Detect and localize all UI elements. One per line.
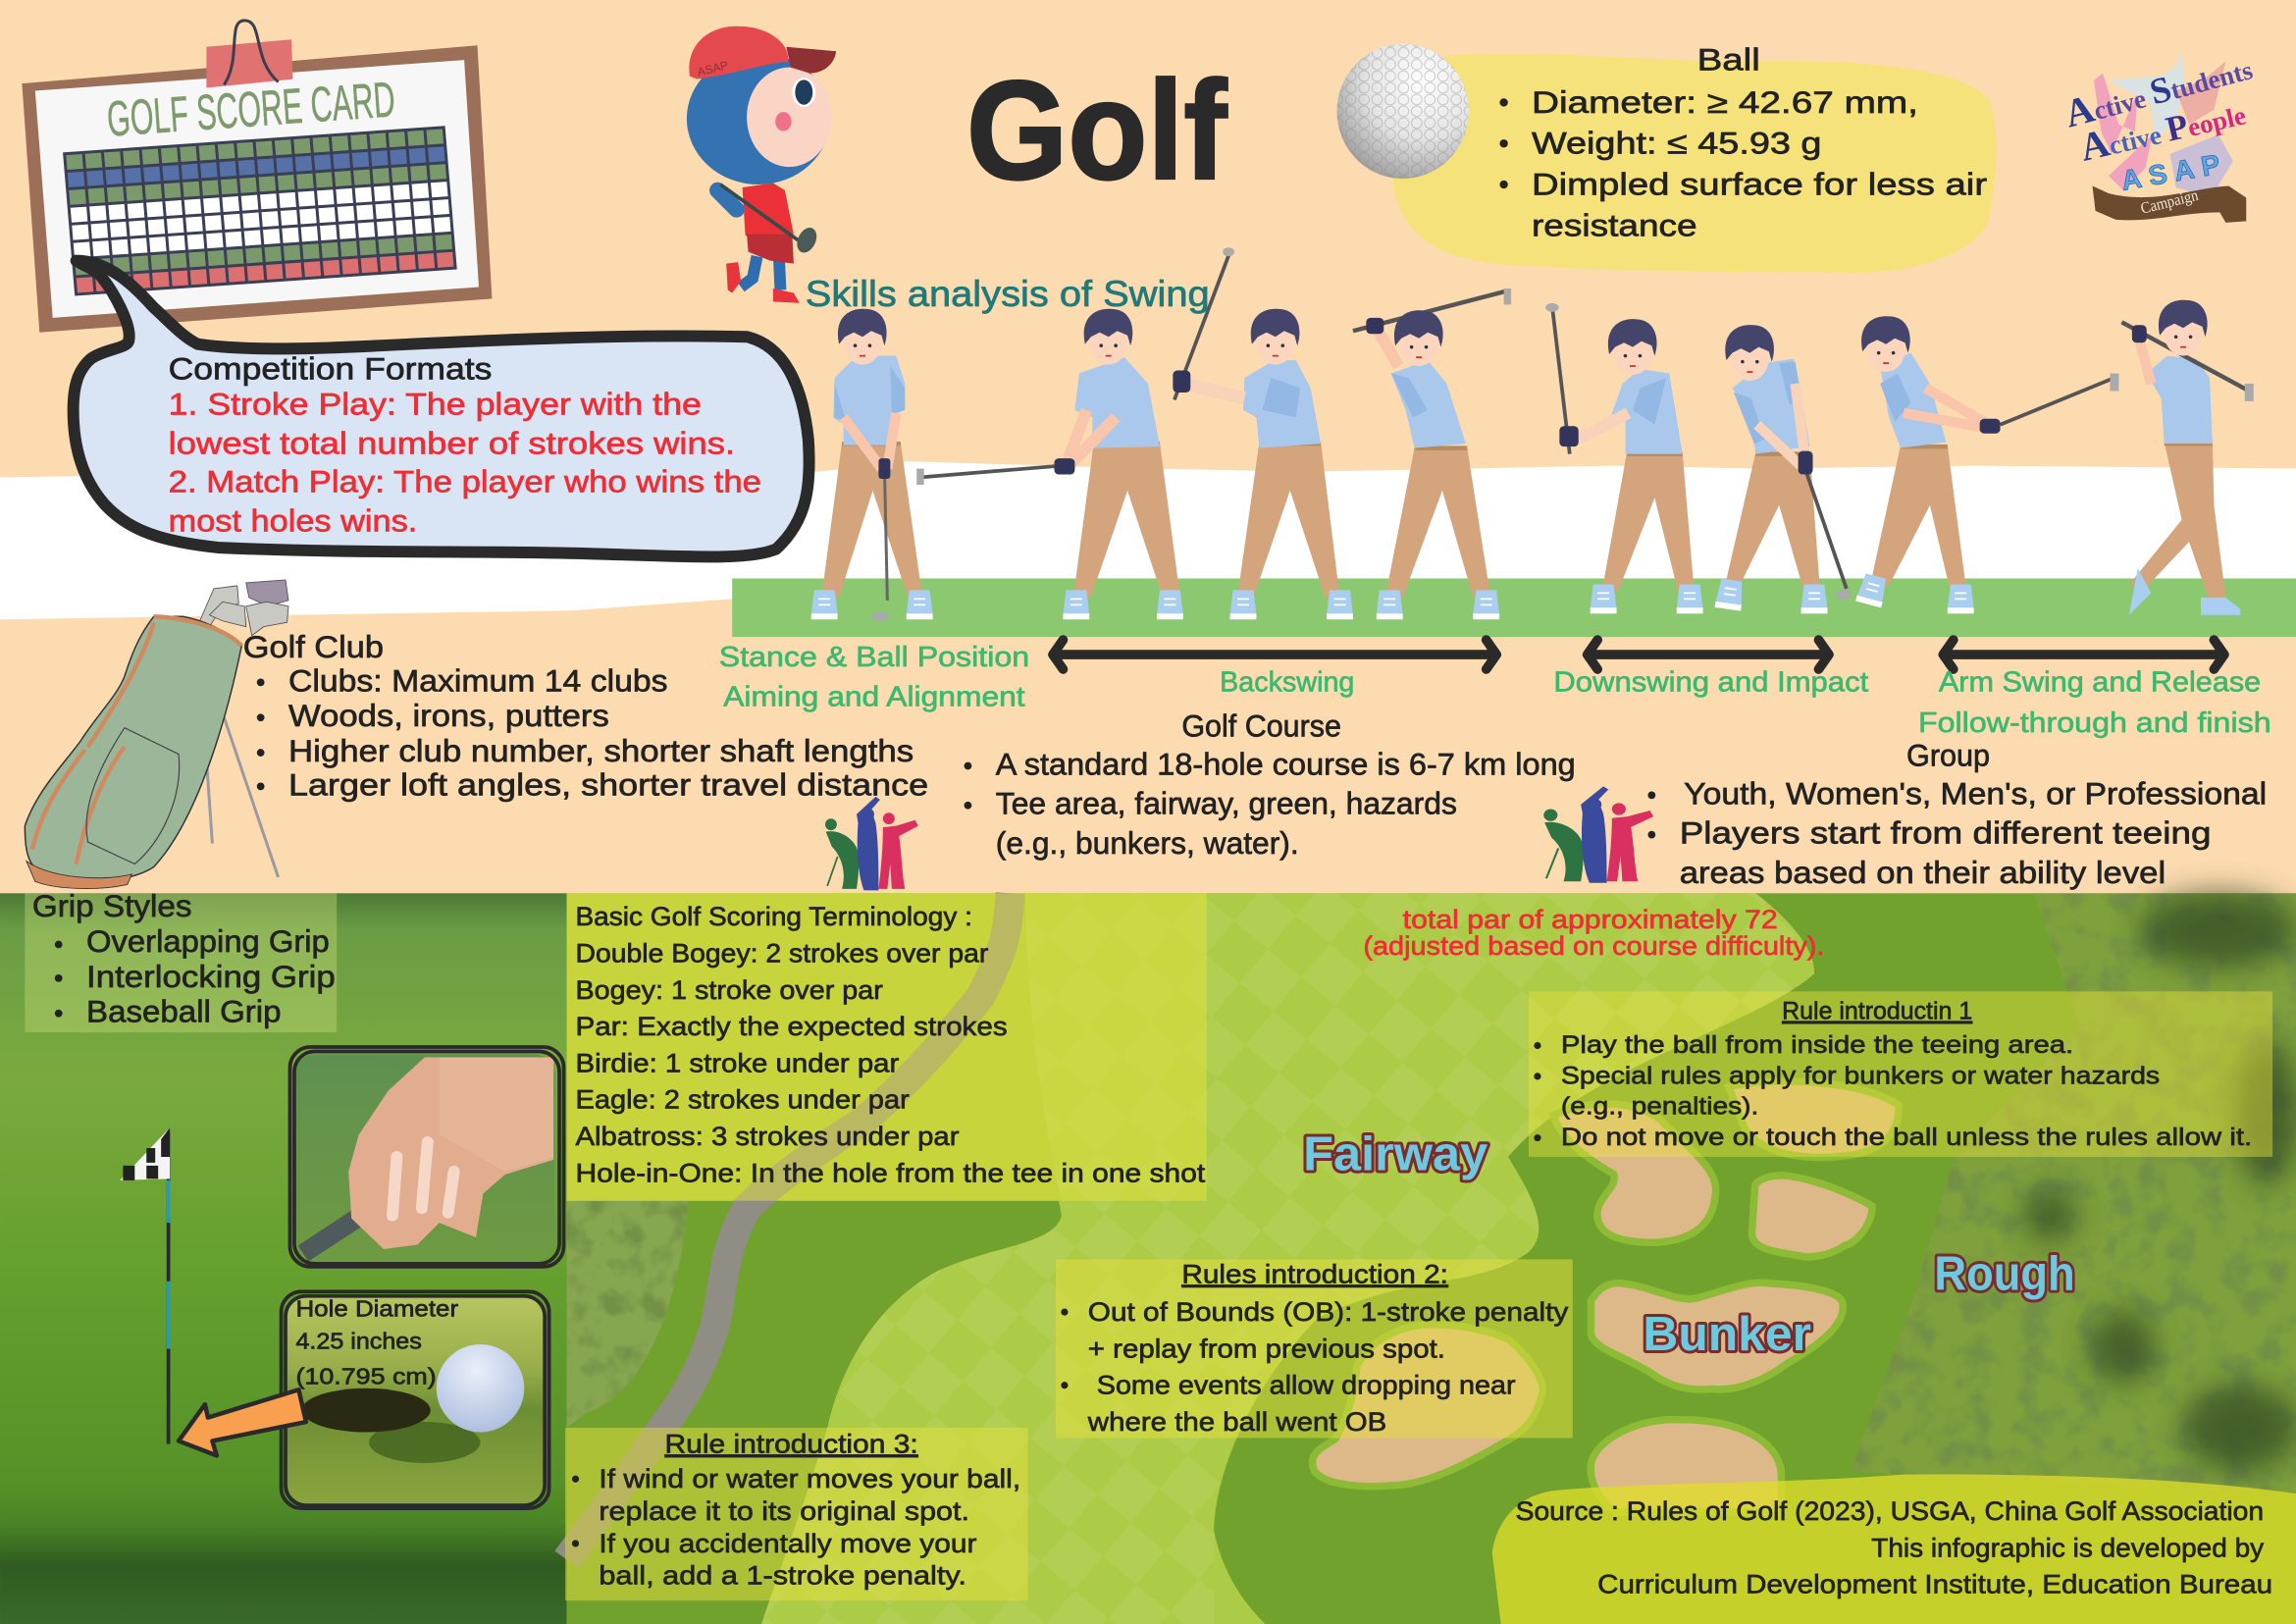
icon: golfer silhouettes large — [1543, 786, 1653, 883]
shoes — [726, 262, 800, 303]
bubble text: most holes wins. — [169, 504, 417, 539]
bubble text: 1. Stroke Play: The player with the — [169, 387, 702, 421]
panel: rules introduction 2: Rules introduction 2: — [1181, 1259, 1448, 1288]
swing figure 6 — [1714, 325, 1851, 613]
ball bullets — [1499, 85, 1987, 242]
panel: group: Group — [1906, 738, 1990, 772]
rule 2 bullets: + replay from previous spot. — [1088, 1334, 1445, 1363]
photo: hole diameter: (10.795 cm) — [295, 1363, 437, 1388]
score grid — [65, 128, 455, 294]
rule 1 bullets: Play the ball from inside the teeing area. — [1561, 1031, 2073, 1059]
eye — [792, 78, 815, 107]
panel: scoring terminology — [567, 893, 1207, 1201]
swing figure 3 — [1173, 247, 1353, 619]
rule 3 bullets: If you accidentally move your — [599, 1529, 976, 1558]
icon: golfer silhouettes small — [825, 797, 918, 890]
panel: group — [1647, 738, 2267, 890]
mascot golfer — [687, 26, 836, 303]
club — [720, 184, 798, 240]
panel: source credits: Source : Rules of Golf (2023), USGA, China Golf Association — [1516, 1496, 2264, 1526]
ball bullets: Diameter: ≥ 42.67 mm, — [1532, 85, 1918, 120]
bag trim — [32, 616, 241, 864]
bubble text — [169, 387, 761, 539]
label: bunker: Bunker — [1643, 1307, 1811, 1361]
bubble text: lowest total number of strokes wins. — [169, 427, 735, 461]
mowing pattern — [761, 893, 1814, 1624]
double frame — [282, 1291, 549, 1508]
icon: flag on pole — [120, 1127, 170, 1443]
bag pocket — [86, 728, 180, 864]
grip bullets: Overlapping Grip — [86, 924, 330, 959]
club bullets — [257, 663, 928, 802]
panel: scoring terminology: Par: Exactly the expected strokes — [575, 1012, 1008, 1041]
panel: golf course — [965, 709, 1576, 861]
logo wordmark line 2: Active People — [2076, 89, 2249, 170]
swing figure 1 — [811, 309, 933, 621]
shirt — [743, 183, 794, 236]
blob — [1392, 54, 1996, 273]
panel: scoring terminology: Eagle: 2 strokes under par — [575, 1085, 910, 1115]
face — [747, 68, 832, 167]
bunkers — [1316, 1085, 1895, 1508]
club bullets: Higher club number, shorter shaft lengths — [288, 734, 913, 768]
group bullets: Players start from different teeing — [1680, 816, 2211, 851]
panel: fairway aerial background — [567, 892, 2296, 1624]
score card — [22, 21, 492, 333]
panel: rule introduction 1: Rule introductin 1 — [1782, 998, 1972, 1025]
rule 3 bullets: replace it to its original spot. — [599, 1496, 969, 1526]
rule 1 bullets — [1534, 1031, 2252, 1151]
card sheet — [35, 60, 479, 318]
group bullets: Youth, Women's, Men's, or Professional — [1684, 776, 2267, 811]
panel: source credits: Curriculum Development Institute, Education Bureau — [1597, 1570, 2272, 1599]
rough strip left — [567, 1201, 688, 1428]
rule 1 bullets: (e.g., penalties). — [1561, 1093, 1758, 1121]
panel: scoring terminology: Hole-in-One: In the hole from the tee in one shot — [575, 1158, 1206, 1187]
grip bullets — [55, 924, 336, 1029]
club bullets: Clubs: Maximum 14 clubs — [288, 663, 668, 698]
ball bullets: resistance — [1532, 208, 1697, 242]
group bullets: areas based on their ability level — [1680, 856, 2166, 890]
swing phase labels — [719, 642, 2271, 739]
panel: ball facts — [1332, 41, 1996, 273]
binder clip — [206, 21, 292, 88]
panel: rule introduction 3 — [565, 1428, 1028, 1600]
panel: scoring terminology: Birdie: 1 stroke under par — [575, 1048, 899, 1077]
hole — [301, 1388, 431, 1433]
upper left rough — [567, 893, 1062, 1201]
background: peach paper — [0, 0, 2296, 896]
cap visor — [786, 47, 836, 74]
course bullets: A standard 18-hole course is 6-7 km long — [996, 747, 1576, 781]
photo: hole diameter — [282, 1291, 549, 1508]
swing phase labels: Backswing — [1220, 666, 1354, 698]
silhouettes — [2094, 51, 2233, 197]
rule 3 bullets: ball, add a 1-stroke penalty. — [599, 1561, 966, 1591]
ground strip — [732, 578, 2296, 637]
rule 2 bullets: where the ball went OB — [1087, 1407, 1386, 1437]
swing figure 4 — [1353, 288, 1511, 619]
panel: rule introduction 3: Rule introduction 3: — [665, 1429, 918, 1458]
swing figure 8 — [2121, 300, 2254, 615]
card frame — [22, 45, 492, 333]
ball bullets: Weight: ≤ 45.93 g — [1532, 127, 1821, 161]
cap — [689, 26, 788, 79]
swing figure 7 — [1855, 316, 2118, 613]
mascot golfer: ASAP — [696, 58, 729, 79]
swing phase labels: Aiming and Alignment — [723, 681, 1025, 712]
panel: scoring terminology: Albatross: 3 strokes under par — [575, 1122, 960, 1151]
hood — [687, 53, 830, 184]
course bullets — [965, 747, 1576, 861]
label: rough: Rough — [1934, 1247, 2075, 1301]
swing figure 2 — [916, 309, 1183, 619]
golf bag illustration — [25, 580, 288, 889]
rule 2 bullets: Some events allow dropping near — [1097, 1371, 1516, 1400]
light fairway — [761, 893, 1814, 1624]
grip bullets: Baseball Grip — [86, 995, 282, 1029]
clubs — [199, 580, 288, 636]
arm — [717, 190, 737, 209]
swing phase labels: Downswing and Impact — [1553, 666, 1868, 698]
heading: skills analysis: Skills analysis of Swing — [806, 273, 1210, 314]
panel: rule introduction 1 — [1529, 991, 2272, 1157]
swing phase labels: Arm Swing and Release — [1939, 666, 2261, 698]
arrow: backswing span — [1053, 640, 1496, 669]
title: Golf — [966, 52, 1227, 209]
rough strip texture — [567, 1201, 688, 1415]
golf ball — [1332, 41, 1473, 182]
bag base — [26, 861, 131, 889]
dark tree masses — [2023, 892, 2296, 1472]
callout: total par: (adjusted based on course difficulty). — [1363, 931, 1824, 961]
rule 2 bullets — [1061, 1297, 1569, 1437]
rule 3 bullets — [572, 1464, 1020, 1591]
panel: grip styles: Grip Styles — [32, 889, 192, 923]
course bullets: Tee area, fairway, green, hazards — [996, 787, 1457, 821]
panel: source credits: This infographic is developed by — [1871, 1533, 2265, 1562]
bag stand legs — [205, 705, 279, 877]
panel: grip styles — [25, 889, 337, 1032]
grip shaft — [303, 1195, 392, 1253]
callout: total par: total par of approximately 72 — [1403, 905, 1778, 934]
ball shadow — [369, 1422, 480, 1463]
panel: golf club: Golf Club — [243, 630, 384, 664]
hole text: Hole Diameter — [295, 1296, 458, 1322]
club bullets: Larger loft angles, shorter travel distance — [288, 767, 928, 802]
ribbon — [2093, 186, 2246, 223]
panel: rules introduction 2 — [1056, 1259, 1573, 1438]
rough and trees — [1851, 893, 2296, 1493]
photo: hole diameter: 4.25 inches — [295, 1328, 422, 1353]
panel: scoring terminology: Bogey: 1 stroke over par — [575, 975, 883, 1005]
cart path — [567, 893, 1011, 1559]
hand — [348, 1057, 553, 1249]
panel: scoring terminology: Double Bogey: 2 strokes over par — [575, 938, 988, 968]
ball heading: Ball — [1697, 43, 1760, 78]
arrow: downswing span — [1588, 640, 1829, 669]
rule 3 bullets: If wind or water moves your ball, — [599, 1464, 1020, 1493]
club bullets: Woods, irons, putters — [288, 699, 609, 733]
panel: scoring terminology: Basic Golf Scoring Terminology : — [575, 902, 972, 931]
background: white band — [0, 461, 2296, 619]
swing figure 5 — [1545, 303, 1703, 613]
callout: total par — [1363, 905, 1824, 961]
grip bullets: Interlocking Grip — [86, 960, 336, 994]
course bullets: (e.g., bunkers, water). — [996, 826, 1299, 861]
ball — [437, 1344, 524, 1433]
panel: golf club — [243, 630, 928, 802]
bag body — [25, 616, 241, 882]
double frame — [289, 1047, 564, 1267]
bubble heading: Competition Formats — [169, 352, 492, 387]
panel: golf course: Golf Course — [1181, 709, 1341, 744]
card title: GOLF SCORE CARD — [105, 71, 396, 147]
label: fairway: Fairway — [1303, 1126, 1488, 1180]
logo wordmark line 1: Active Students — [2060, 44, 2257, 136]
speech bubble: competition formats — [74, 261, 809, 556]
swing phase labels: Follow-through and finish — [1918, 707, 2271, 739]
legs — [741, 256, 780, 289]
shorts — [747, 235, 794, 264]
panel: green flag area background — [0, 893, 567, 1624]
arrow: orange to flag — [179, 1389, 306, 1455]
arrow: release span — [1943, 640, 2224, 669]
bubble text: 2. Match Play: The player who wins the — [169, 464, 761, 498]
cheek — [775, 112, 792, 131]
swing phase labels: Stance & Ball Position — [719, 642, 1029, 673]
ASAP logo — [2060, 44, 2257, 223]
logo ASAP letters: ASAP — [2119, 149, 2222, 197]
rule 1 bullets: Do not move or touch the ball unless the rules allow it. — [1561, 1124, 2252, 1151]
rule 2 bullets: Out of Bounds (OB): 1-stroke penalty — [1088, 1297, 1569, 1327]
group bullets — [1647, 776, 2267, 890]
ball bullets: Dimpled surface for less air — [1532, 167, 1987, 201]
panel: source credits — [1492, 1475, 2296, 1624]
rule 1 bullets: Special rules apply for bunkers or water hazards — [1561, 1062, 2160, 1089]
photo: grip hand — [289, 1047, 564, 1267]
tree texture — [1830, 893, 2296, 1508]
ribbon text: Campaign — [2139, 185, 2200, 218]
